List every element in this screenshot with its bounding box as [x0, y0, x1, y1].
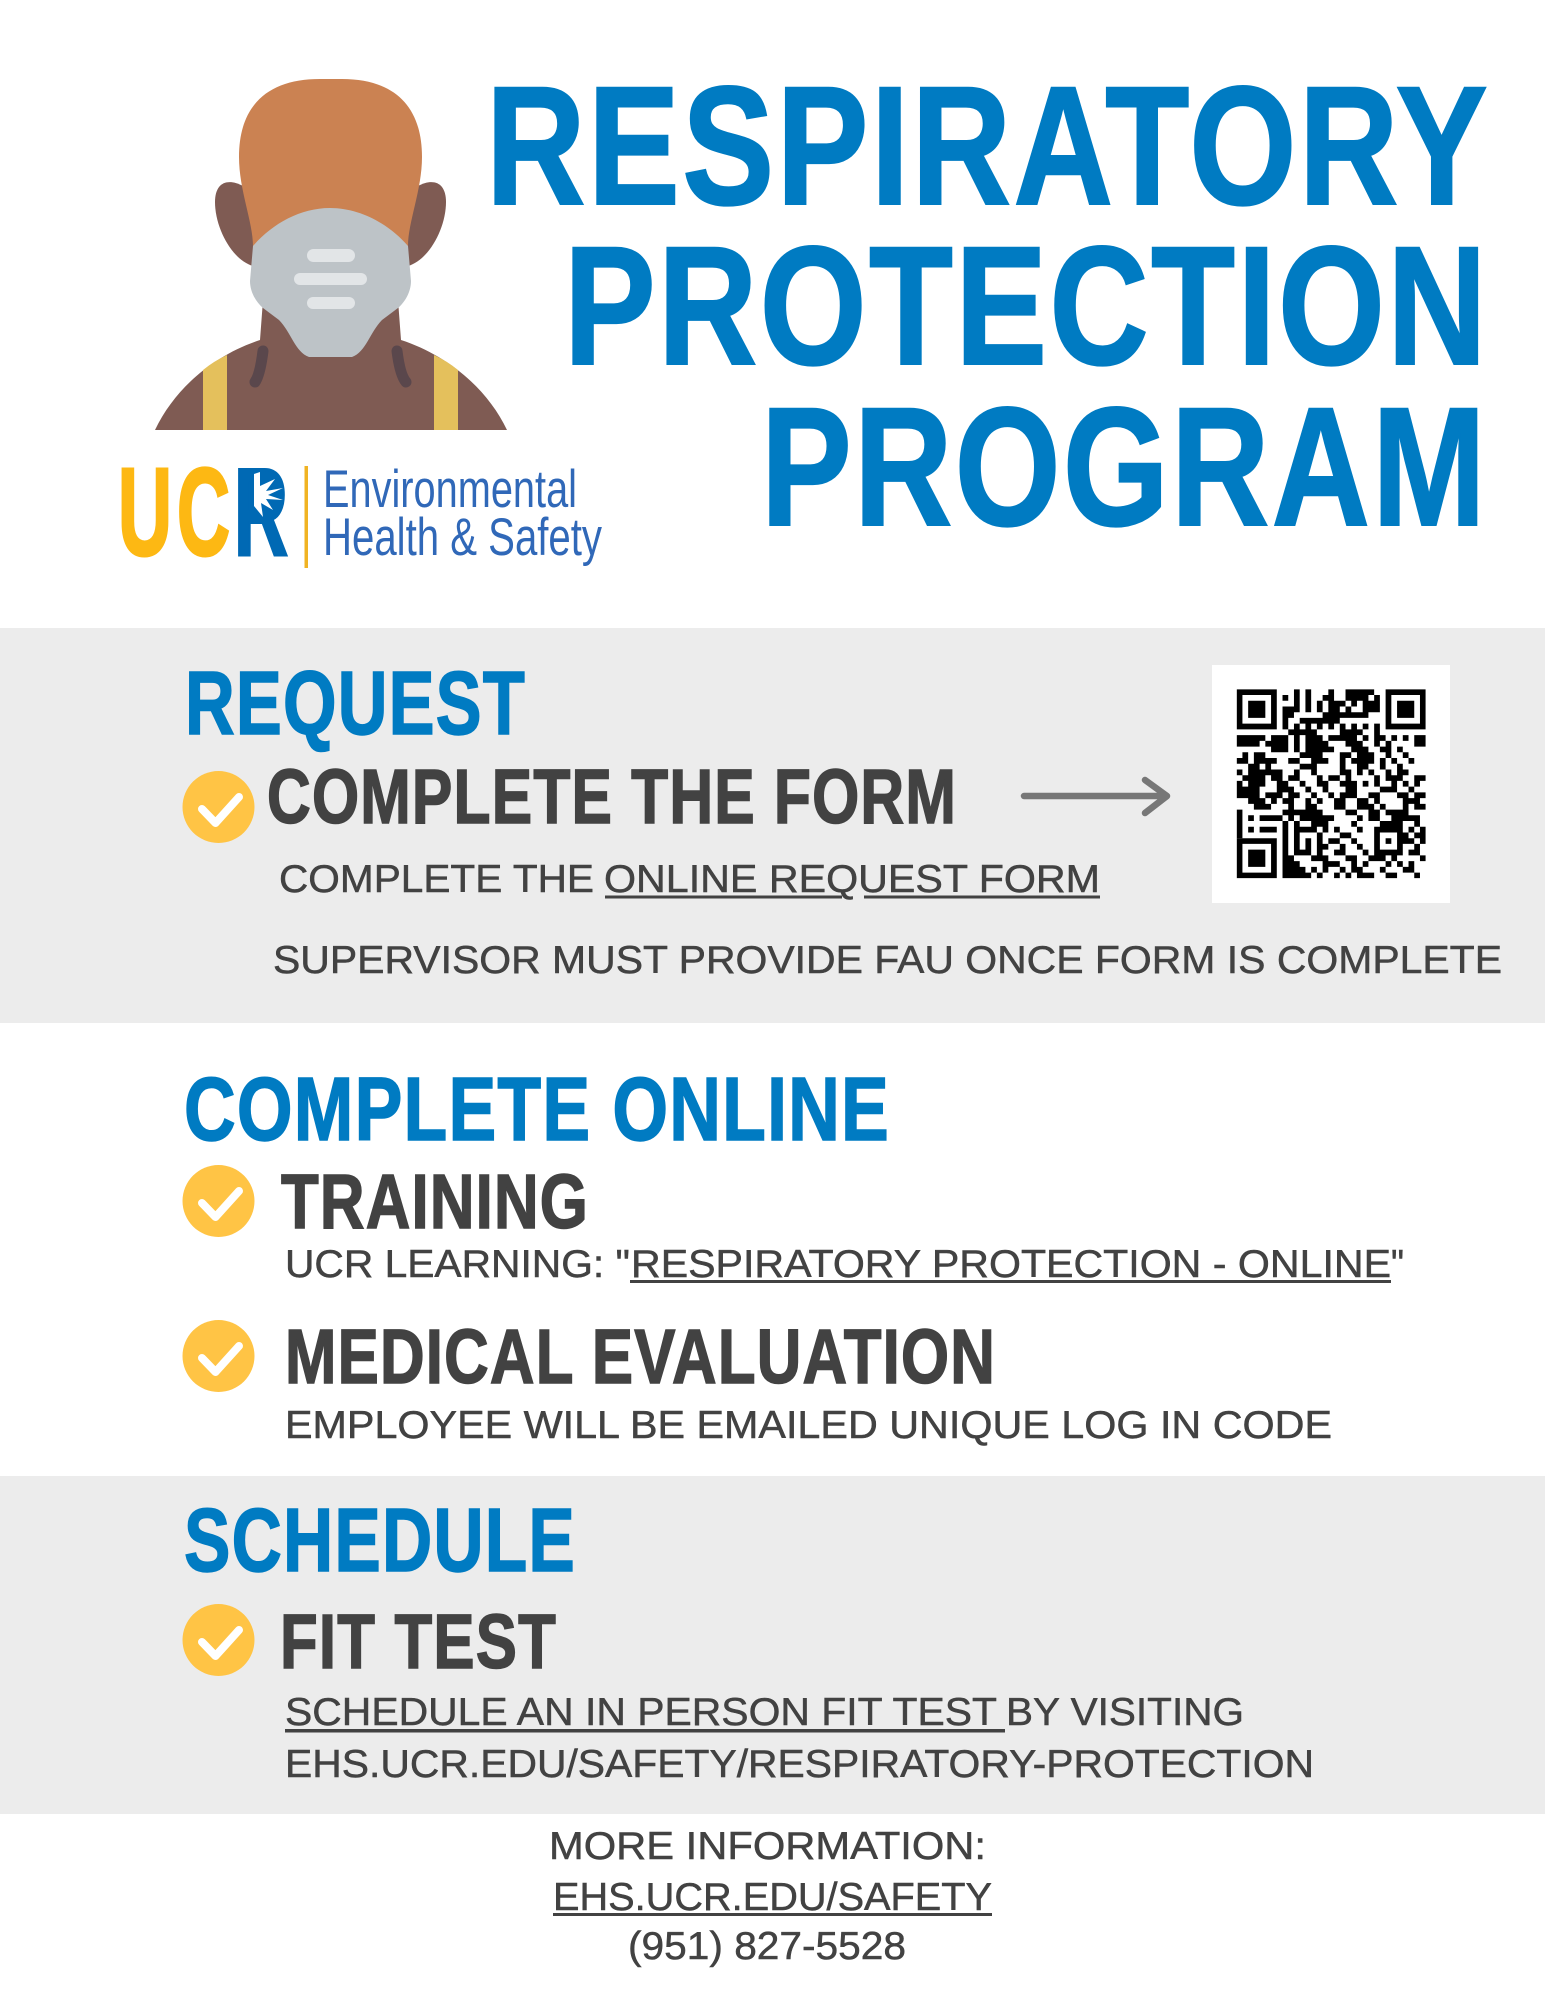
subheading: fit test: FIT TEST — [280, 1599, 557, 1685]
logo: UCR Environmental Health & Safety: R — [234, 444, 288, 582]
icon: check 1 — [182, 771, 254, 843]
logo: UCR Environmental Health & Safety: C — [177, 444, 230, 582]
text: schedule fit test: BY VISITING — [1006, 1691, 1244, 1734]
text: UCR learning: RESPIRATORY PROTECTION - ONLINE — [631, 1243, 1391, 1286]
logo: UCR Environmental Health & Safety: Health & Safety — [323, 508, 602, 567]
footer: more information — [549, 1825, 992, 1968]
logo: UCR Environmental Health & Safety — [118, 444, 602, 582]
text: online request form — [279, 858, 1100, 901]
icon: check 2 — [182, 1165, 254, 1237]
panel: request — [0, 628, 1545, 1023]
text: employee emailed: EMPLOYEE WILL BE EMAILED UNIQUE LOG IN CODE — [285, 1404, 1332, 1447]
text: supervisor FAU: SUPERVISOR MUST PROVIDE FAU ONCE FORM IS COMPLETE — [273, 939, 1502, 982]
text: UCR learning: " — [1391, 1243, 1404, 1286]
icon: check 4 — [182, 1604, 254, 1676]
text: schedule fit test: SCHEDULE AN IN PERSON FIT TEST — [285, 1691, 997, 1734]
subheading: complete the form: COMPLETE THE FORM — [267, 754, 957, 840]
arrow to QR code — [1024, 780, 1167, 813]
heading: request: REQUEST — [185, 654, 526, 754]
text: UCR learning — [285, 1243, 1404, 1286]
heading: schedule: SCHEDULE — [184, 1491, 576, 1591]
text: online request form: ONLINE REQUEST FORM — [604, 858, 1100, 901]
logo: UCR Environmental Health & Safety: U — [118, 444, 172, 582]
text: online request form: COMPLETE THE — [279, 858, 594, 901]
text: schedule fit test — [285, 1691, 1314, 1786]
footer: more information: (951) 827-5528 — [628, 1925, 906, 1968]
QR code — [1212, 665, 1450, 903]
logo: UCR Environmental Health & Safety: Environmental — [323, 460, 577, 519]
text: UCR learning: UCR LEARNING: " — [285, 1243, 630, 1286]
icon: worker wearing respirator mask — [155, 79, 507, 430]
icon: check 3 — [182, 1320, 254, 1392]
title — [486, 51, 1490, 561]
panel: schedule — [0, 1476, 1545, 1814]
footer: more information: EHS.UCR.EDU/SAFETY — [553, 1876, 992, 1919]
heading: complete online: COMPLETE ONLINE — [184, 1060, 890, 1160]
subheading: training: TRAINING — [281, 1159, 589, 1245]
text: schedule fit test: EHS.UCR.EDU/SAFETY/RESPIRATORY-PROTECTION — [285, 1743, 1314, 1786]
subheading: medical evaluation: MEDICAL EVALUATION — [285, 1314, 996, 1400]
footer: more information: MORE INFORMATION: — [549, 1825, 986, 1868]
